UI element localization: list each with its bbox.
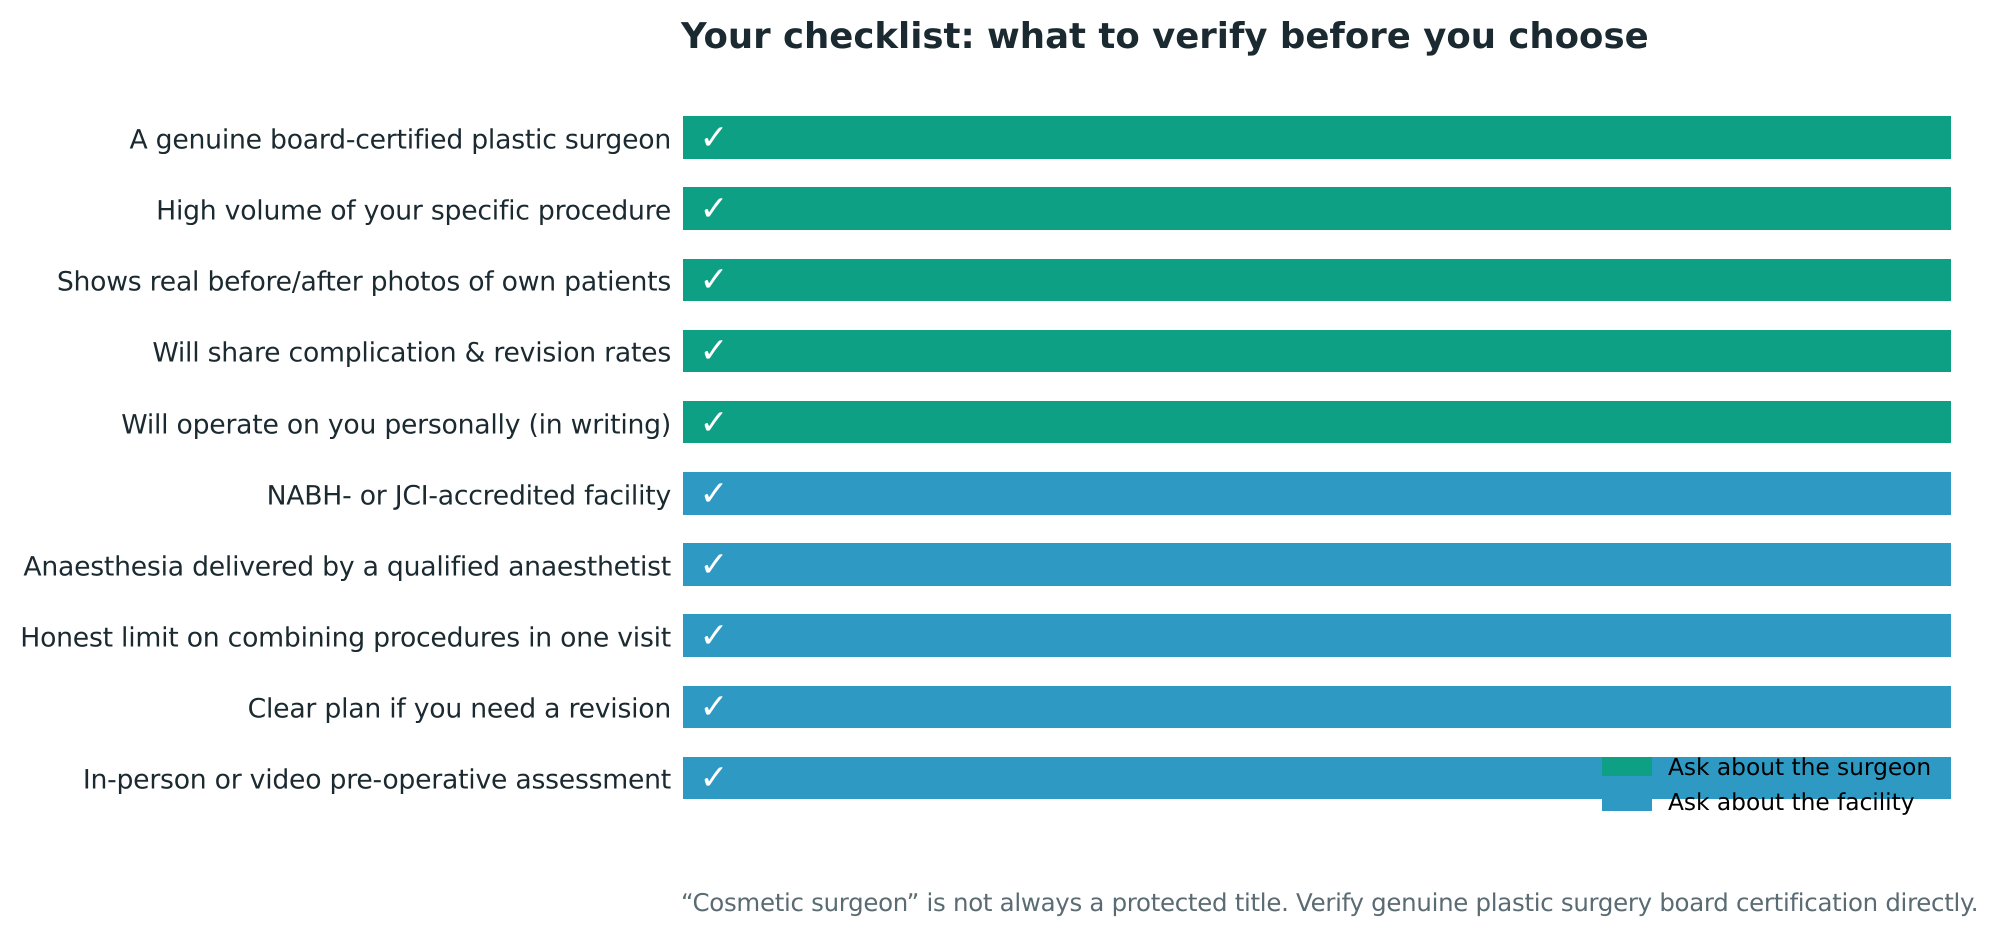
- row: operate personally: ✓: [700, 403, 728, 443]
- row: board-certified surgeon: [129, 116, 1951, 159]
- legend: Ask about the facility: [1668, 788, 1915, 816]
- row: complication rates: Will share complication & revision rates: [152, 338, 671, 368]
- row: before/after photos: ✓: [700, 260, 728, 300]
- legend: [1602, 753, 1931, 816]
- row: accredited facility: ✓: [700, 474, 728, 514]
- footnote: “Cosmetic surgeon” is not always a protected title. Verify genuine plastic surgery board certification directly.: [681, 888, 1978, 917]
- row: anaesthesia: [23, 543, 1951, 586]
- row: pre-operative assessment: [83, 757, 1951, 799]
- row: board-certified surgeon: ✓: [700, 118, 728, 158]
- row: accredited facility: [267, 472, 1951, 515]
- row: combining procedures: ✓: [700, 616, 728, 656]
- row: high volume: ✓: [700, 189, 728, 229]
- row: complication rates: ✓: [700, 331, 728, 371]
- row: revision plan: Clear plan if you need a revision: [248, 694, 671, 724]
- legend: Ask about the surgeon: [1668, 753, 1931, 781]
- row: high volume: High volume of your specific procedure: [156, 196, 671, 226]
- row: before/after photos: [57, 259, 1951, 301]
- row: board-certified surgeon: A genuine board-certified plastic surgeon: [129, 124, 671, 156]
- row: operate personally: Will operate on you personally (in writing): [121, 410, 671, 440]
- title: Your checklist: what to verify before you choose: [680, 16, 1649, 57]
- row: pre-operative assessment: In-person or video pre-operative assessment: [83, 764, 671, 796]
- row: revision plan: ✓: [700, 687, 728, 727]
- row: anaesthesia: Anaesthesia delivered by a qualified anaesthetist: [23, 552, 671, 582]
- row: revision plan: [248, 686, 1951, 728]
- row: complication rates: [152, 330, 1951, 372]
- row: combining procedures: [20, 614, 1951, 657]
- row: pre-operative assessment: ✓: [700, 758, 728, 798]
- row: anaesthesia: ✓: [700, 545, 728, 585]
- row: accredited facility: NABH- or JCI-accredited facility: [267, 480, 671, 512]
- row: before/after photos: Shows real before/after photos of own patients: [57, 266, 671, 298]
- row: high volume: [156, 187, 1951, 230]
- row: combining procedures: Honest limit on combining procedures in one visit: [20, 622, 671, 654]
- row: operate personally: [121, 401, 1951, 443]
